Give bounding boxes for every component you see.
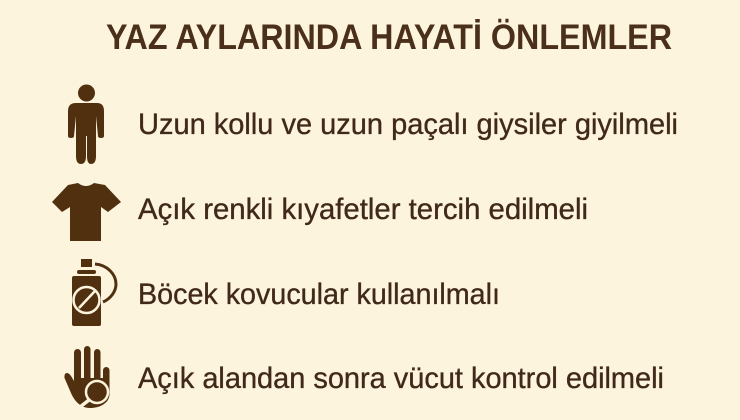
text: long clothing: Uzun kollu ve uzun paçalı giysiler giyilmeli [138, 108, 678, 141]
icon: repellent spray [72, 259, 116, 326]
text: insect repellent: Böcek kovucular kullanılmalı [138, 278, 500, 311]
icon: person [68, 84, 104, 164]
title: YAZ AYLARINDA HAYATİ ÖNLEMLER [106, 18, 672, 57]
icon: hand with magnifier [64, 346, 110, 408]
icon: t-shirt [52, 183, 121, 241]
text: light colours: Açık renkli kıyafetler tercih edilmeli [138, 193, 588, 226]
text: body check: Açık alandan sonra vücut kontrol edilmeli [138, 362, 664, 395]
